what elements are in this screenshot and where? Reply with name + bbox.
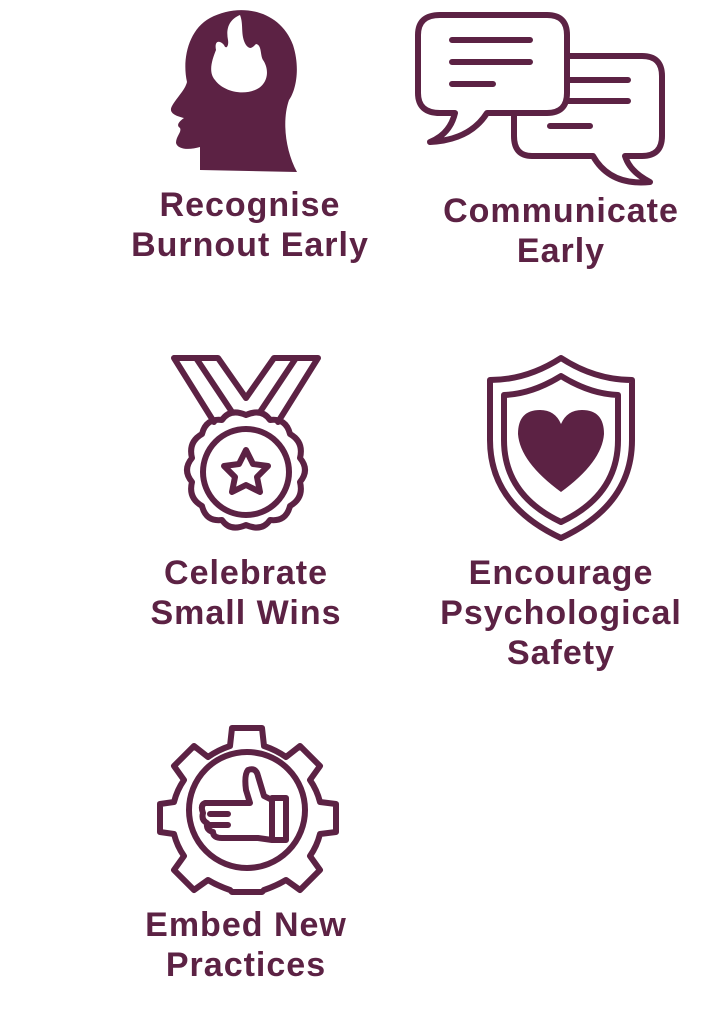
text: Celebrate Small Wins: Celebrate [164,554,328,592]
text: Encourage Psychological Safety: Safety [507,634,615,672]
text: Embed New Practices: Practices [166,946,326,984]
text: Celebrate Small Wins [150,554,342,632]
icon: head with flame [170,10,297,172]
icon: shield with heart [487,355,635,541]
text: Recognise Burnout Early [131,186,369,264]
icon: medal [171,355,321,531]
icon: speech bubbles [415,12,665,186]
text: Communicate Early: Communicate [443,192,679,230]
text: Encourage Psychological Safety: Encourage [469,554,653,592]
text: Communicate Early: Early [517,232,605,270]
text: Embed New Practices [145,906,347,984]
text: Celebrate Small Wins: Small Wins [150,594,342,632]
text: Embed New Practices: Embed New [145,906,347,944]
text: Encourage Psychological Safety: Psychological [440,594,682,632]
text: Encourage Psychological Safety [440,554,682,672]
text: Recognise Burnout Early: Burnout Early [131,226,369,264]
icon: gear with thumbs up [157,725,339,895]
text: Recognise Burnout Early: Recognise [160,186,340,224]
text: Communicate Early [443,192,679,270]
